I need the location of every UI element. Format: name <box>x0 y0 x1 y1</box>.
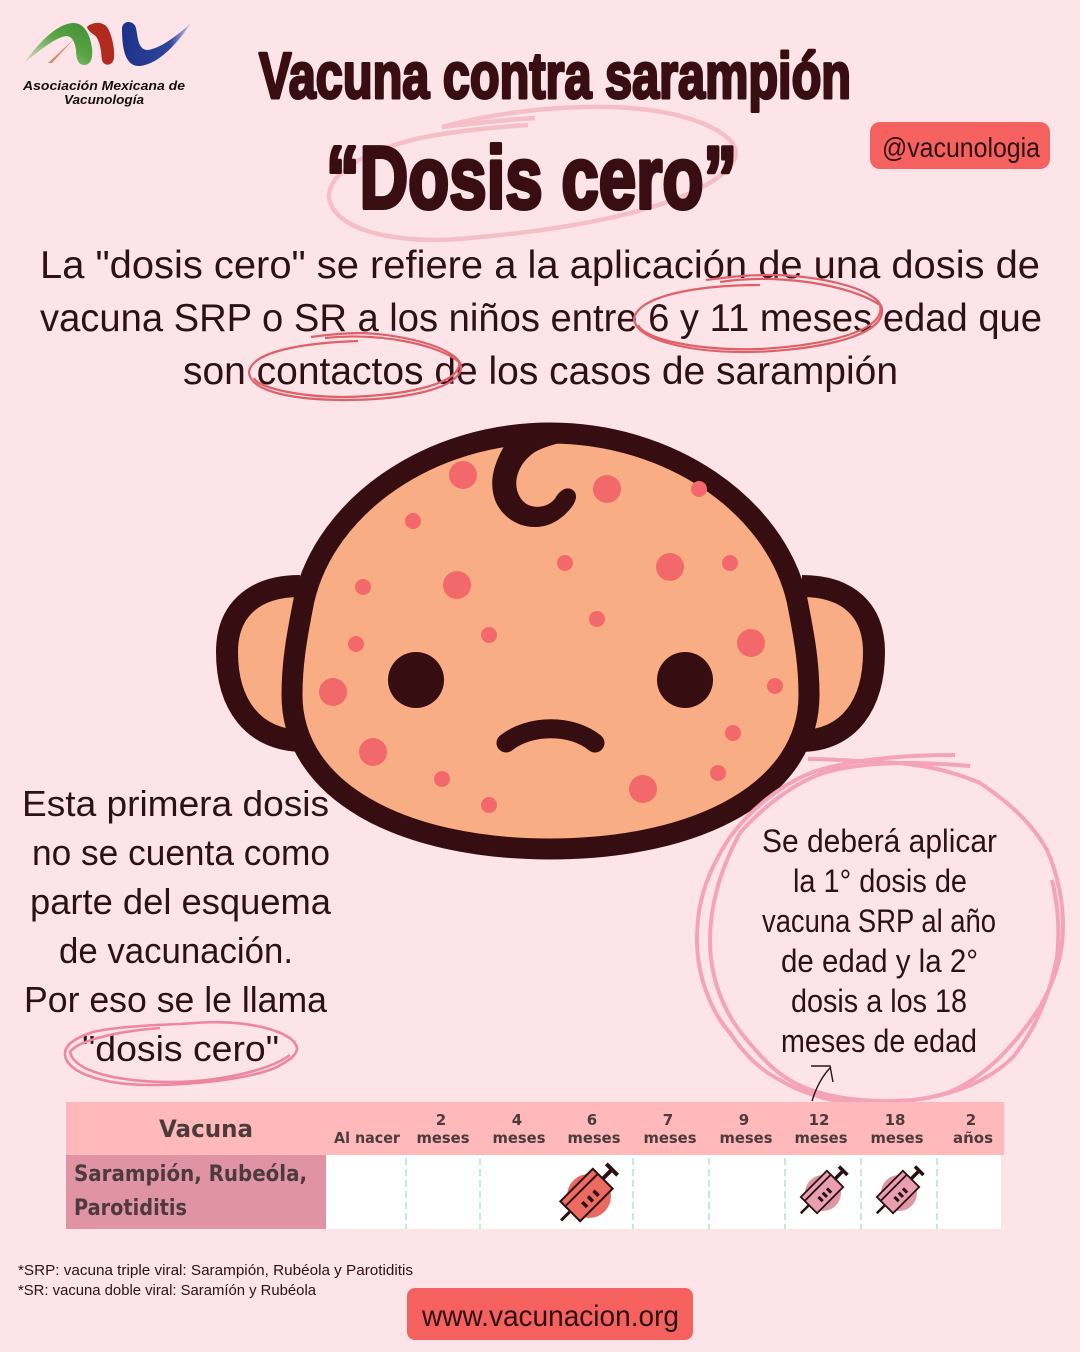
logo: Asociación Mexicana de Vacunología <box>22 22 191 107</box>
rash spots <box>319 461 783 813</box>
title: Vacuna contra sarampión <box>259 39 851 112</box>
logo: Asociación Mexicana de Vacunología: Vacunología <box>64 92 144 107</box>
footnotes: *SRP: vacuna triple viral: Sarampión, Rubéola y Parotiditis <box>18 1262 413 1279</box>
table header labels: años <box>953 1129 993 1147</box>
table header labels: meses <box>794 1129 848 1147</box>
left note text: no se cuenta como <box>32 832 330 873</box>
table header labels: Vacuna <box>159 1115 253 1143</box>
handle tag <box>870 122 1050 169</box>
callout text: de edad y la 2° <box>781 943 978 979</box>
footnotes <box>18 1262 413 1299</box>
table header labels <box>159 1111 993 1147</box>
icon: syringe 18 meses <box>869 1163 927 1221</box>
intro text <box>40 244 1042 393</box>
callout text <box>762 823 997 1059</box>
highlight scribble: Dosis cero <box>329 107 736 240</box>
table header labels: meses <box>720 1129 773 1147</box>
head <box>292 433 809 849</box>
left ear <box>227 586 304 741</box>
table header labels: 4 <box>512 1111 522 1129</box>
vaccination schedule table <box>66 1102 1004 1230</box>
right ear <box>800 586 874 741</box>
subtitle: “Dosis cero” <box>326 128 737 227</box>
row label: Parotiditis <box>74 1196 187 1221</box>
table header labels: 18 <box>885 1111 905 1129</box>
table header labels: meses <box>492 1129 546 1147</box>
intro text: La "dosis cero" se refiere a la aplicación de una dosis de <box>40 244 1040 287</box>
row label <box>74 1162 307 1221</box>
table header labels: meses <box>870 1129 924 1147</box>
left note text: "dosis cero" <box>82 1028 279 1069</box>
table header labels: 2 <box>966 1111 976 1129</box>
callout text: dosis a los 18 <box>791 983 967 1019</box>
callout text: Se deberá aplicar <box>762 823 997 859</box>
highlight: dosis cero <box>65 1022 297 1085</box>
table header labels: 12 <box>809 1111 829 1129</box>
icon: syringe 12 meses <box>793 1163 851 1221</box>
callout text: vacuna SRP al año <box>762 903 996 939</box>
handle tag: @vacunologia <box>882 132 1040 163</box>
title <box>259 39 851 227</box>
left note text: parte del esquema <box>30 881 332 922</box>
left note text: Por eso se le llama <box>24 979 328 1020</box>
intro text: vacuna SRP o SR a los niños entre 6 y 11 meses edad que <box>40 297 1042 340</box>
illustration: sick baby face <box>227 433 874 849</box>
website button <box>407 1288 693 1340</box>
logo: Asociación Mexicana de Vacunología: Asociación Mexicana de <box>22 78 185 93</box>
callout text: meses de edad <box>781 1023 977 1059</box>
table header labels: 6 <box>587 1111 597 1129</box>
highlight: contactos <box>249 333 461 400</box>
intro text: son contactos de los casos de sarampión <box>183 350 898 393</box>
table header labels: meses <box>568 1129 621 1147</box>
left note text <box>22 783 332 1069</box>
website button: www.vacunacion.org <box>421 1300 679 1333</box>
footnotes: *SR: vacuna doble viral: Saramíón y Rubéola <box>18 1282 317 1299</box>
row label: Sarampión, Rubeóla, <box>74 1162 307 1187</box>
icon: syringe 6 meses <box>551 1160 622 1230</box>
callout scribble circle <box>697 755 1063 1103</box>
eyes <box>388 652 713 708</box>
left note text: de vacunación. <box>59 930 293 971</box>
table header labels: 2 <box>436 1111 446 1129</box>
table header labels: meses <box>416 1129 470 1147</box>
table header labels: Al nacer <box>334 1129 401 1147</box>
hair curl <box>492 440 576 527</box>
left note text: Esta primera dosis <box>22 783 329 824</box>
table header labels: 7 <box>663 1111 673 1129</box>
table header labels: 9 <box>739 1111 749 1129</box>
table header labels: meses <box>644 1129 697 1147</box>
mouth <box>506 729 595 743</box>
callout text: la 1° dosis de <box>793 863 967 899</box>
highlight: 6 y 11 meses <box>634 275 882 352</box>
arrow to 12 meses <box>811 1066 833 1101</box>
